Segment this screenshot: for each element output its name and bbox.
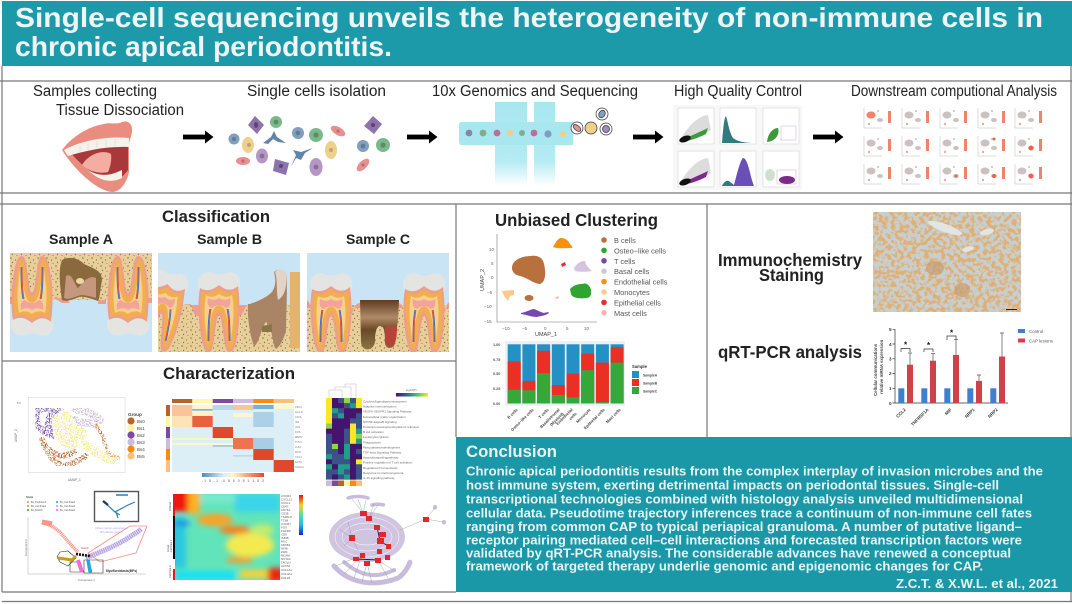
chart: qRT-PCR bars: CCL2 (895, 407, 907, 419)
pathway labels: NIK/NF-kappaB signaling (363, 420, 397, 424)
chart: pseudotime trajectory: Component 2 (24, 539, 28, 556)
citation: Z.C.T. & X.W.L. et al., 2021 (896, 576, 1059, 591)
chart: sample composition stacked bars: Mast cells (605, 407, 622, 424)
trajectory legend: Bs_Cell Fate2 (60, 501, 76, 504)
pseudotime gene labels: MYC (281, 540, 287, 544)
image: histology staining (873, 212, 1021, 312)
pseudotime gene labels: CD38 (281, 512, 289, 516)
chart: UMAP of clusters: UMAP_2 (480, 269, 486, 291)
pathway labels: Response to interferongamma (363, 471, 404, 475)
chart: sample composition stacked bars: cells (568, 411, 578, 421)
pseudotime gene labels: JUNB (281, 536, 289, 540)
chart: regulatory network (329, 496, 444, 583)
icon: open mouth (62, 121, 132, 192)
heading: immunochemistry staining (718, 250, 862, 285)
chart: sample composition stacked bars: 0.50 (493, 372, 500, 376)
heatmap gene labels: FOS (295, 430, 301, 434)
legend: clusters: Endothelial cells (614, 278, 668, 287)
inset trajectory (94, 492, 138, 522)
heading: qRT-PCR analysis: qRT-PCR analysis (718, 342, 862, 362)
chart: pseudotime gene heatmap: Preload (168, 502, 172, 511)
legend: qPCR (1018, 329, 1054, 344)
chart: sample composition stacked bars: Monocyte (575, 407, 592, 424)
chart: UMAP of clusters: UMAP_1 (535, 332, 557, 338)
pseudotime gene labels: CD47 (281, 504, 289, 508)
chart: UMAP of clusters: −10 (484, 304, 492, 309)
conclusion body: Chronic apical periodontitis results from the complex interplay of invasion microbes and the (466, 464, 1043, 478)
chart: UMAP of clusters: 10 (489, 247, 495, 252)
heading: immunochemistry staining: Staining (759, 265, 824, 285)
heading: Unbiased Clustering (495, 210, 658, 230)
chart: UMAP of clusters: −15 (484, 319, 492, 324)
pathway labels: Regulationof homeostasis (363, 466, 398, 470)
icon: 10x chip (459, 102, 612, 186)
pathway labels: Leukocytemigration (363, 435, 389, 439)
heading: Characterization (163, 364, 295, 383)
pseudotime gene labels: ZJ84 (281, 550, 288, 554)
heatmap gene labels: TAGLN (295, 465, 304, 469)
pseudotime gene labels: TSPAN7 (281, 515, 292, 519)
legend: group: Group (128, 412, 142, 417)
chart: UMAP of clusters (480, 234, 597, 338)
legend: sample (632, 364, 658, 394)
chart: pathway enrichment heatmap (326, 384, 428, 486)
pseudotime gene labels: ACTA2 (281, 564, 290, 568)
heatmap gene labels: ID2 (295, 420, 300, 424)
pathway labels: Phagocytosis (363, 440, 381, 444)
legend: group: Bs5 (137, 454, 145, 459)
legend: group: Bs1 (137, 426, 145, 431)
panel: validation (718, 212, 1054, 427)
chart: sample composition stacked bars: Epithelial cells (583, 407, 606, 430)
colour key: log10(P) (406, 388, 417, 392)
heatmap gene labels: ACTA (295, 460, 302, 464)
pathway labels: Musculartissuedevelopment (363, 445, 400, 449)
chart: sample composition stacked bars: Basal/stromal (539, 407, 561, 429)
pseudotime gene labels: TAGLN (281, 560, 290, 564)
heading: immunochemistry staining: Immunochemistry (718, 250, 862, 270)
chart: pseudotime trajectory: Component 1 (78, 578, 95, 582)
heatmap gene labels: LUM (295, 445, 300, 449)
legend: clusters: Basal cells (614, 267, 650, 276)
chart: qRT-PCR bars: * (927, 341, 931, 350)
chart: pseudotime trajectory: Myofibroblasts(MFs) (106, 569, 137, 573)
pathway labels: Proteinprocessinginendoplasmic reticulum (363, 425, 420, 429)
pseudotime gene labels: CD9 (281, 532, 287, 536)
icon: isolated cells (228, 116, 390, 176)
pseudotime gene labels: CXCR4 (281, 494, 291, 498)
chart: UMAP of clusters: 5 (566, 326, 569, 331)
label: sample B: Sample B (197, 231, 262, 247)
chart: pseudotime trajectory (24, 492, 147, 582)
label: sample A: Sample A (49, 231, 113, 247)
illustration: sample B teeth (158, 253, 300, 352)
title banner: Single-cell sequencing unveils the heterogeneity of non-immune cells in (15, 2, 1043, 33)
chart: qRT-PCR bars: 1 (889, 386, 892, 391)
title banner (2, 1, 1072, 66)
legend: group: Bs4 (137, 447, 145, 452)
chart: UMAP of clusters: −10 (502, 326, 510, 331)
legend: qPCR: CAP lesions (1029, 338, 1054, 344)
legend: group (127, 412, 145, 460)
pseudotime gene labels: CXCL12 (281, 498, 292, 502)
pseudotime gene labels: CXCL1 (281, 501, 291, 505)
chart: qRT-PCR bars (873, 327, 1054, 427)
pathway labels: Positive regulation of T cell activation (363, 461, 413, 465)
chart: qRT-PCR bars: Cellular communications (873, 343, 878, 396)
chart: qRT-PCR bars: 5 (889, 327, 892, 332)
chart: qRT-PCR bars: relative mRNA expression (879, 339, 884, 394)
arrow (183, 130, 214, 144)
pseudotime gene labels: COL3A1 (281, 572, 292, 576)
chart: qRT-PCR bars: 2 (889, 371, 892, 376)
legend: clusters: Osteo−like cells (614, 246, 666, 255)
chart: pseudotime gene heatmap: Cell Fate 1 (169, 539, 173, 552)
chart: sample composition stacked bars: 0.75 (493, 358, 500, 362)
legend: sample: SampleB (643, 382, 658, 386)
chart: sample composition stacked bars: (Myeloid) (549, 411, 565, 427)
panel: conclusion (456, 437, 1072, 592)
chart: UMAP of clusters: 10 (584, 326, 590, 331)
chart: pseudotime gene heatmap: Group (166, 544, 170, 552)
legend: qPCR: Control (1029, 329, 1043, 334)
heatmap gene labels: CXCL (295, 415, 302, 419)
pseudotime gene labels: KDFB1 (281, 543, 291, 547)
pathway labels: Apoptoticsignalingpathway (363, 456, 399, 460)
pseudotime gene labels: MCAM (281, 554, 290, 558)
heatmap gene labels: MMP2 (295, 435, 303, 439)
chart: marker gene heatmap (166, 399, 304, 483)
title banner: chronic apical periodontitis. (15, 31, 392, 62)
pathway labels: VEGFA-VEGFR2 Signaling Pathway (363, 410, 412, 414)
chart: pseudotime trajectory: fibroblasts (iAFs) (100, 530, 123, 534)
chart: UMAP of subclusters: UMAP_2 (14, 429, 18, 442)
chart: qRT-PCR bars: 4 (889, 342, 892, 347)
pseudotime gene labels: CXCR7 (281, 522, 291, 526)
illustration: sample A teeth (10, 253, 152, 352)
chart: pseudotime trajectory: branch (81, 546, 89, 550)
heatmap gene labels: CD74 (295, 405, 302, 409)
pathway labels: TGF-beta Signaling Pathway (363, 450, 402, 454)
step heading: samples collecting: Samples collecting (33, 83, 157, 100)
conclusion heading: Conclusion (466, 442, 557, 461)
pseudotime gene labels: TCIM (281, 518, 289, 522)
legend: group: Bs3 (137, 440, 145, 445)
chart: qRT-PCR bars: MIF (944, 407, 953, 416)
chart: qRT-PCR bars: * (904, 340, 908, 350)
chart: qRT-PCR bars: NRP1 (964, 407, 976, 419)
colour bar (299, 495, 303, 535)
legend: clusters: T cells (614, 257, 636, 266)
panel: unbiased clustering (480, 210, 668, 432)
chart: sample composition stacked bars: Endothelial (555, 407, 574, 426)
chart: pseudotime gene heatmap: Cell Fate 2 (168, 565, 172, 578)
pathway labels: IL-16 signaling pathway (363, 476, 395, 480)
pathway labels: Cytokine/ligand/genomicssystem (363, 400, 407, 404)
illustration: sample C teeth (307, 253, 449, 353)
chart: qRT-PCR bars: 3 (889, 356, 892, 362)
conclusion body: host immune system, exerting detrimental impacts on periodontal tissues. Single-cell (466, 478, 999, 492)
arrow (633, 130, 664, 144)
chart: UMAP of clusters: 0 (544, 326, 547, 331)
conclusion body: cellular data. Pseudotime trajectory inferences trace a continuum of non-immune cell fates (466, 506, 1032, 520)
legend: sample: SampleC (643, 390, 658, 394)
chart: sample composition stacked bars (493, 341, 658, 432)
trajectory legend (26, 495, 76, 512)
pathway labels: B cell activation (363, 430, 384, 434)
chart: sample composition stacked bars: 0.00 (493, 402, 500, 406)
legend: group: Bs0 (137, 419, 145, 424)
pseudotime gene labels: NFIB (281, 546, 288, 550)
step heading: tissue dissociation: Tissue Dissociation (56, 102, 184, 119)
chart: pseudotime trajectory: Inflammation-associated (95, 526, 128, 530)
trajectory legend: Bs_Cell Fate3 (60, 505, 76, 508)
legend: clusters: Monocytes (614, 288, 650, 297)
chart: UMAP of clusters: 5 (491, 261, 494, 266)
legend: clusters: Mast cells (614, 309, 647, 318)
pathway labels: Adaptive immune/system (363, 405, 397, 409)
chart: pseudotime gene heatmap (167, 494, 303, 580)
trajectory legend: Bs_Branch (31, 509, 43, 512)
chart: sample composition stacked bars: Osteo−like cells (510, 407, 535, 432)
pseudotime gene labels: FOS (281, 526, 287, 530)
legend: clusters: B cells (614, 236, 636, 245)
pseudotime gene labels: CD74A (281, 508, 290, 512)
heatmap gene labels: THY1 (295, 440, 302, 444)
trajectory legend: Bs_Prebranch (31, 501, 47, 504)
chart: qRT-PCR bars: TNFRSF1A (910, 407, 930, 427)
heatmap gene labels: DCN (295, 450, 301, 454)
heatmap gene labels: HLA-D (295, 410, 303, 414)
chart: sample composition stacked bars: B cells (506, 407, 519, 420)
conclusion body: receptor pairing mediated cell–cell interactions and forecasted transcription factors were (466, 532, 1022, 548)
pathway labels: Extracellular matrix organization (363, 415, 406, 419)
panel: workflow (33, 83, 1057, 192)
chart: sample composition stacked bars: 1.00 (493, 343, 500, 347)
trajectory legend: State (26, 495, 34, 499)
step heading: single cells isolation: Single cells isolation (247, 83, 386, 100)
chart: UMAP of clusters: −5 (522, 326, 528, 331)
legend: group: Bs2 (137, 433, 145, 438)
conclusion body: ranging from common CAP to typical periapical granuloma. A number of putative ligand– (466, 519, 1022, 534)
chart: UMAP of subclusters: UMAP_1 (68, 478, 81, 482)
chart: sample composition stacked bars: 0.25 (493, 387, 500, 391)
chart: sample composition stacked bars: T cells (537, 407, 550, 420)
heading: Classification (162, 207, 270, 226)
legend: clusters (601, 236, 668, 318)
pathway labels (363, 400, 420, 480)
heatmap gene labels (295, 405, 304, 469)
trajectory legend: Bs_Cell Fate4 (60, 509, 76, 512)
conclusion body (466, 464, 1043, 574)
chart: UMAP of clusters: 0 (491, 275, 494, 280)
panel: classification (10, 207, 449, 354)
chart: flow cytometry quality control (673, 105, 802, 190)
conclusion body: transcriptional technologies combined with histology analysis unveiled multidimensional (466, 492, 1023, 506)
pseudotime gene labels: FGFR3 (281, 529, 291, 533)
heatmap colour scale: -1.5 -1 -0.5 0 0.5 1 1.5 2 (202, 479, 264, 483)
conclusion body: validated by qRT-PCR analysis. The considerable advances have renewed a conceptual (466, 546, 1011, 560)
chart: UMAP of subclusters: 5.0 (17, 401, 21, 405)
pseudotime gene labels: COL18 (281, 576, 291, 580)
trajectory legend: Bs_Cell Fate1 (31, 505, 47, 508)
legend: sample: SampleA (643, 374, 658, 378)
pseudotime gene labels: COL1A1 (281, 568, 292, 572)
chart: qRT-PCR bars: * (950, 328, 954, 338)
conclusion body: framework of targeted therapy underlie genomic and epigenomic changes for CAP. (466, 558, 983, 574)
step heading: quality control: High Quality Control (674, 83, 802, 100)
step heading: 10x genomics: 10x Genomics and Sequencing (432, 83, 638, 100)
chart: UMAP of subclusters (14, 398, 125, 482)
chart: UMAP of clusters: −5 (487, 290, 493, 295)
heatmap gene labels: COL1 (295, 455, 302, 459)
arrow (407, 130, 438, 144)
chart: qRT-PCR bars: 0 (889, 401, 892, 406)
legend: clusters: Epithelial cells (614, 298, 661, 307)
arrow (813, 130, 844, 144)
heatmap gene labels: JUN (295, 425, 300, 429)
pseudotime gene labels: NOTA4 (281, 557, 291, 561)
pseudotime gene labels (281, 494, 292, 580)
chart: qRT-PCR bars: NRP2 (987, 407, 999, 419)
panel: characterization (14, 364, 444, 583)
legend: sample: Sample (632, 364, 648, 369)
chart: feature plots grid (864, 108, 1042, 184)
label: sample C: Sample C (346, 231, 410, 247)
